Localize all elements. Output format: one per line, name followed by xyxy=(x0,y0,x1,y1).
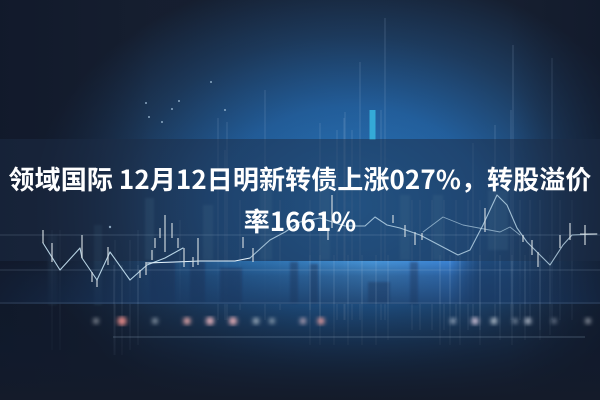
title line 2: 率1661% xyxy=(244,202,356,239)
building silhouettes in strip xyxy=(150,262,418,304)
lower vertical lines xyxy=(114,255,550,355)
strip vertical fade xyxy=(0,261,600,304)
title line 1: 领域国际 12月12日明新转债上涨027%，转股溢价 xyxy=(9,160,591,197)
horizontal lines xyxy=(0,235,600,337)
vertical light lines xyxy=(52,18,572,355)
lower glow strip xyxy=(0,261,600,304)
translucent title band xyxy=(0,139,600,261)
bright cyan bar xyxy=(370,110,376,140)
glowing lights xyxy=(94,316,590,326)
line chart xyxy=(43,195,597,280)
skyline bars xyxy=(48,185,508,305)
bottom fade xyxy=(0,304,600,400)
candlesticks xyxy=(43,195,597,287)
small sparkle dots xyxy=(109,81,226,228)
